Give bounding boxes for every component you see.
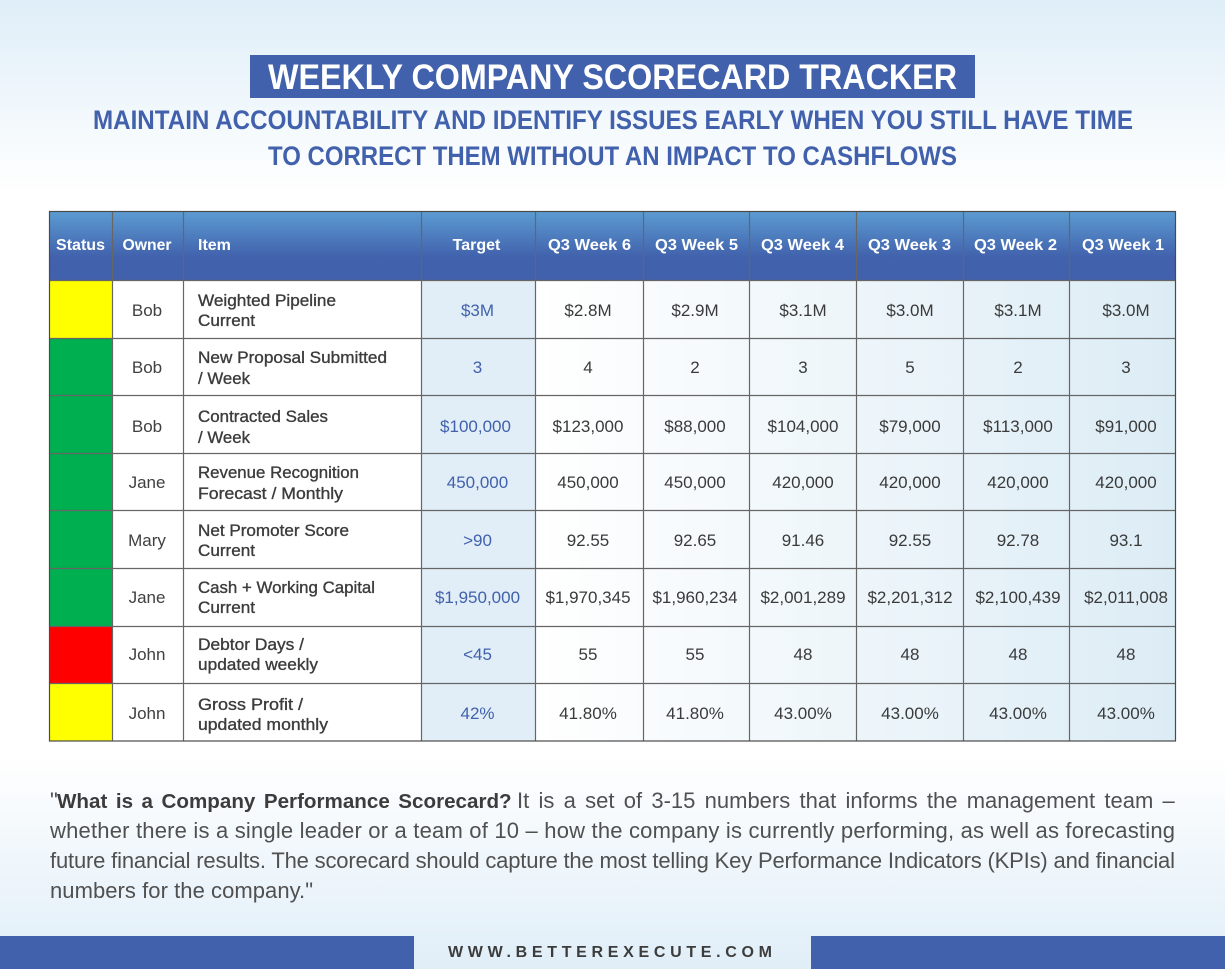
week 2 values: $113,000	[983, 417, 1053, 436]
week 3 values: 43.00%	[881, 704, 939, 723]
week 5 values: 92.65	[674, 531, 716, 550]
week 5 values: 450,000	[664, 473, 726, 492]
footer website: WWW.BETTEREXECUTE.COM	[448, 944, 772, 961]
owner column: John	[129, 704, 165, 723]
week 3 values: 420,000	[879, 473, 941, 492]
week 2 values: 2	[1013, 358, 1023, 377]
definition paragraph: What is a Company Performance Scorecard?	[57, 790, 512, 813]
target column: $1,950,000	[435, 588, 520, 607]
definition paragraph: It is a set of 3-15 numbers that informs the management team –	[517, 788, 1176, 813]
week 3 values: $79,000	[879, 417, 941, 436]
table header row: Q3 Week 5	[655, 237, 738, 254]
week 3 values: 92.55	[889, 531, 931, 550]
item column: / Week	[198, 369, 251, 388]
week 6 values: 55	[579, 645, 597, 664]
week 6 values: 4	[583, 358, 593, 377]
week 1 values: 93.1	[1109, 531, 1143, 550]
table header row: Q3 Week 1	[1082, 237, 1164, 254]
scorecard table	[49, 211, 1176, 741]
week 6 values: 92.55	[567, 531, 609, 550]
item column: Cash + Working Capital	[198, 578, 375, 597]
footer bar left	[0, 936, 414, 969]
definition paragraph: "	[50, 788, 58, 813]
week 1 values: $91,000	[1095, 417, 1157, 436]
footer bar right	[811, 936, 1225, 969]
week 4 values: 3	[798, 358, 808, 377]
week 1 values: 43.00%	[1097, 704, 1155, 723]
week 1 values: $2,011,008	[1084, 588, 1168, 607]
week 1 values: 48	[1117, 645, 1135, 664]
table header row	[49, 211, 1176, 280]
week 5 values: 2	[690, 358, 700, 377]
status column	[49, 280, 112, 741]
owner column: Jane	[129, 473, 165, 492]
week 2 values: 420,000	[987, 473, 1049, 492]
subtitle: MAINTAIN ACCOUNTABILITY AND IDENTIFY ISSUES EARLY WHEN YOU STILL HAVE TIME	[93, 105, 1133, 135]
subtitle	[93, 105, 1133, 171]
target column: $3M	[461, 301, 494, 320]
week 1 values: $3.0M	[1102, 301, 1150, 320]
owner column	[128, 301, 166, 723]
week 6 values	[545, 301, 631, 723]
week 5 values: 41.80%	[666, 704, 724, 723]
item column: Gross Profit /	[198, 695, 303, 714]
item column: Contracted Sales	[198, 407, 328, 426]
week 5 values: 55	[686, 645, 704, 664]
item column: updated monthly	[198, 715, 329, 734]
week 4 values	[760, 301, 846, 723]
week 6 values: $2.8M	[564, 301, 612, 320]
week 2 values: 92.78	[997, 531, 1039, 550]
item column: Current	[198, 598, 255, 617]
table header row: Target	[453, 237, 501, 254]
week 5 values: $1,960,234	[652, 588, 738, 607]
owner column: Bob	[132, 358, 162, 377]
week 3 values: 5	[905, 358, 915, 377]
table header row: Q3 Week 4	[761, 237, 844, 254]
owner column: Bob	[132, 417, 162, 436]
table header row: Owner	[122, 237, 172, 254]
week 4 values: $104,000	[768, 417, 838, 436]
item column	[198, 291, 387, 734]
item column: New Proposal Submitted	[198, 348, 387, 367]
item column: Forecast / Monthly	[198, 484, 344, 503]
week 1 values: 3	[1121, 358, 1131, 377]
week 4 values: $3.1M	[779, 301, 827, 320]
item column: updated weekly	[198, 655, 319, 674]
week 3 values	[867, 301, 953, 723]
target column	[435, 301, 520, 723]
week 3 values: $3.0M	[886, 301, 934, 320]
target column: $100,000	[440, 417, 511, 436]
target column: >90	[463, 531, 492, 550]
definition paragraph: numbers for the company."	[50, 878, 313, 903]
item column: Current	[198, 311, 255, 330]
week 6 values: 450,000	[557, 473, 619, 492]
definition paragraph: whether there is a single leader or a team of 10 – how the company is currently performing, as well as forecasting	[49, 818, 1175, 843]
week 6 values: $123,000	[553, 417, 623, 436]
table header row: Item	[198, 237, 231, 254]
week 4 values: 43.00%	[774, 704, 832, 723]
owner column: John	[129, 645, 165, 664]
target column: <45	[463, 645, 492, 664]
week 2 values: 43.00%	[989, 704, 1047, 723]
week 4 values: $2,001,289	[760, 588, 846, 607]
definition paragraph	[49, 788, 1176, 903]
subtitle: TO CORRECT THEM WITHOUT AN IMPACT TO CASHFLOWS	[268, 141, 957, 171]
item column: Net Promoter Score	[198, 521, 349, 540]
table header row: Q3 Week 2	[974, 237, 1057, 254]
item column: / Week	[198, 428, 251, 447]
week 5 values: $2.9M	[671, 301, 719, 320]
title banner: WEEKLY COMPANY SCORECARD TRACKER	[268, 58, 957, 97]
week 5 values: $88,000	[664, 417, 726, 436]
owner column: Bob	[132, 301, 162, 320]
target column: 450,000	[447, 473, 508, 492]
week 6 values: $1,970,345	[545, 588, 631, 607]
table header row: Q3 Week 3	[868, 237, 951, 254]
item column: Debtor Days /	[198, 635, 304, 654]
owner column: Jane	[129, 588, 165, 607]
week 2 values: $2,100,439	[975, 588, 1061, 607]
target column: 42%	[460, 704, 495, 723]
table header row: Status	[56, 237, 105, 254]
target column: 3	[473, 358, 482, 377]
table header row: Q3 Week 6	[548, 237, 631, 254]
week 4 values: 420,000	[772, 473, 834, 492]
owner column: Mary	[128, 531, 166, 550]
week 6 values: 41.80%	[559, 704, 617, 723]
item column: Current	[198, 541, 255, 560]
week 3 values: 48	[901, 645, 919, 664]
week 2 values	[975, 301, 1061, 723]
week 2 values: $3.1M	[994, 301, 1042, 320]
week 2 values: 48	[1009, 645, 1027, 664]
definition paragraph: future financial results. The scorecard should capture the most telling Key Performance Indicators (KPIs) and financial	[50, 848, 1175, 873]
week 4 values: 91.46	[782, 531, 824, 550]
week 4 values: 48	[794, 645, 812, 664]
week 1 values: 420,000	[1095, 473, 1157, 492]
week 3 values: $2,201,312	[867, 588, 953, 607]
item column: Revenue Recognition	[198, 463, 359, 482]
table cell backgrounds	[112, 280, 1176, 741]
week 1 values	[1084, 301, 1168, 723]
item column: Weighted Pipeline	[198, 291, 336, 310]
week 5 values	[652, 301, 738, 723]
